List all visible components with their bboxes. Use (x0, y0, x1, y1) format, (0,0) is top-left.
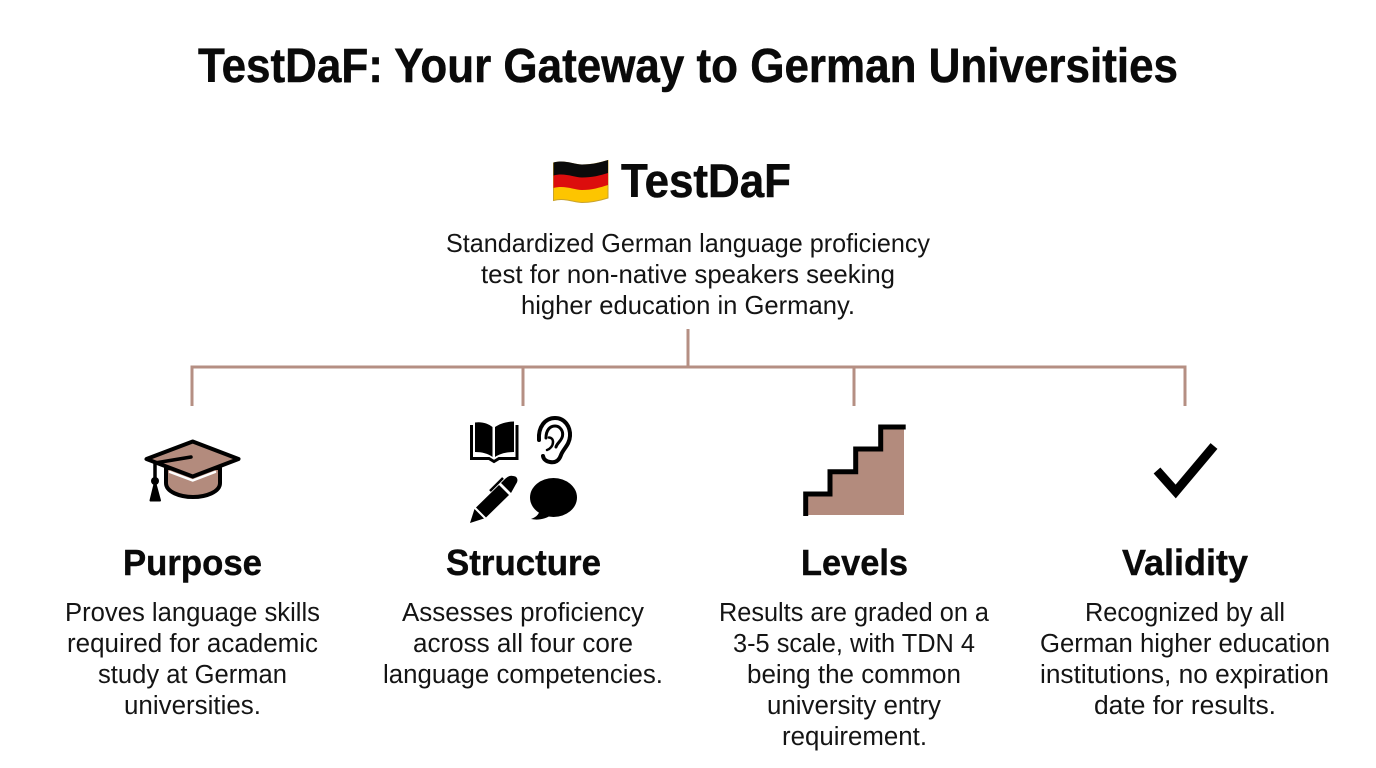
text: Levels description: being the common (747, 661, 961, 689)
text: Purpose description: universities. (124, 692, 261, 720)
column: Purpose (65, 442, 320, 720)
text: Validity description: institutions, no expiration (1040, 661, 1329, 689)
column: Levels (719, 427, 990, 751)
text: Purpose description: Proves language skills (65, 599, 320, 627)
text: Structure description: language competencies. (383, 661, 663, 689)
text: Levels description: Results are graded on a (719, 599, 990, 627)
icon: staircase (806, 427, 906, 516)
central topic (446, 154, 930, 320)
central description: higher education in Germany. (521, 290, 855, 320)
text: Structure description: Assesses proficiency (402, 599, 644, 627)
icon: pen (470, 476, 517, 523)
column: Structure (383, 418, 663, 689)
icon: check mark (1157, 446, 1214, 492)
icon: open book (472, 422, 517, 462)
icon: German flag (554, 160, 608, 202)
title: TestDaF: Your Gateway to German Universities (198, 40, 1178, 93)
text: Levels description: university entry (767, 692, 941, 720)
text: Levels description (719, 599, 990, 751)
central description (446, 228, 930, 320)
text: Validity description: German higher education (1040, 630, 1330, 658)
column: Validity (1040, 446, 1330, 720)
text: Validity description (1040, 599, 1330, 720)
icon: speech bubble (530, 478, 577, 520)
central description: test for non-native speakers seeking (481, 259, 895, 289)
text: Validity description: date for results. (1094, 692, 1276, 720)
text: Purpose description: study at German (98, 661, 287, 689)
heading: Purpose: Purpose (123, 542, 262, 583)
text: Structure description: across all four core (413, 630, 633, 658)
text: Structure description (383, 599, 663, 689)
text: Validity description: Recognized by all (1085, 599, 1285, 627)
text: Levels description: 3-5 scale, with TDN 4 (733, 630, 975, 658)
icon: ear (539, 418, 570, 462)
text: Purpose description (65, 599, 320, 720)
central heading: TestDaF (621, 154, 791, 207)
text: Purpose description: required for academic (67, 630, 318, 658)
heading: Validity: Validity (1122, 542, 1248, 583)
text: Levels description: requirement. (782, 723, 927, 751)
central description: Standardized German language proficiency (446, 228, 930, 258)
heading: Levels: Levels (801, 542, 908, 583)
connector tree (192, 329, 1185, 406)
icon: graduation cap (146, 442, 238, 500)
heading: Structure: Structure (446, 542, 601, 583)
